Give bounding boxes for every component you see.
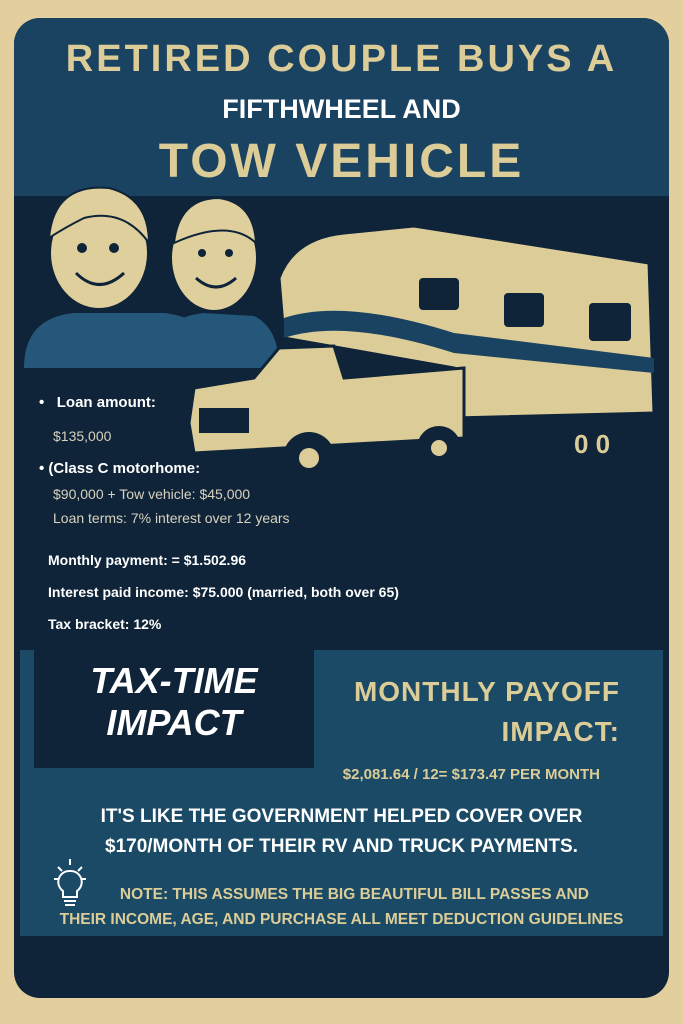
tax-time badge: TAX-TIME — [90, 660, 258, 701]
summary: $170/MONTH OF THEIR RV AND TRUCK PAYMENTS. — [105, 836, 578, 857]
illustration: couple, truck and fifth wheel — [24, 186, 654, 468]
loan details text: • Loan amount: — [39, 394, 156, 411]
loan details text: Tax bracket: 12% — [48, 616, 161, 632]
title — [66, 38, 617, 188]
payoff calc: $2,081.64 / 12= $173.47 PER MONTH — [343, 766, 600, 783]
note: NOTE: THIS ASSUMES THE BIG BEAUTIFUL BILL PASSES AND — [120, 886, 589, 903]
truck — [189, 346, 464, 484]
monthly payoff heading: IMPACT: — [502, 716, 620, 747]
monthly payoff heading — [354, 676, 620, 747]
fifth wheel trailer: 0 0 — [574, 429, 610, 459]
loan details text — [39, 394, 399, 632]
title: TOW VEHICLE — [159, 135, 524, 188]
loan details text: Loan terms: 7% interest over 12 years — [53, 510, 290, 526]
title: RETIRED COUPLE BUYS A — [66, 38, 617, 80]
summary — [101, 806, 582, 857]
tax-time badge: IMPACT — [106, 702, 242, 743]
fifth wheel trailer — [279, 226, 654, 459]
loan details text: $90,000 + Tow vehicle: $45,000 — [53, 486, 250, 502]
icon: lightbulb — [54, 859, 86, 906]
loan details text: $135,000 — [53, 428, 111, 444]
loan details text: Interest paid income: $75.000 (married, both over 65) — [48, 584, 399, 600]
note: THEIR INCOME, AGE, AND PURCHASE ALL MEET DEDUCTION GUIDELINES — [60, 911, 623, 928]
monthly payoff heading: MONTHLY PAYOFF — [354, 676, 620, 707]
loan details text: Monthly payment: = $1.502.96 — [48, 552, 246, 568]
title: FIFTHWHEEL AND — [222, 94, 461, 124]
note — [60, 886, 623, 928]
header band — [14, 18, 669, 196]
tax-time badge — [34, 650, 314, 768]
couple — [24, 188, 279, 368]
summary: IT'S LIKE THE GOVERNMENT HELPED COVER OVER — [101, 806, 582, 827]
loan details text: • (Class C motorhome: — [39, 460, 200, 477]
impact panel — [20, 650, 663, 936]
